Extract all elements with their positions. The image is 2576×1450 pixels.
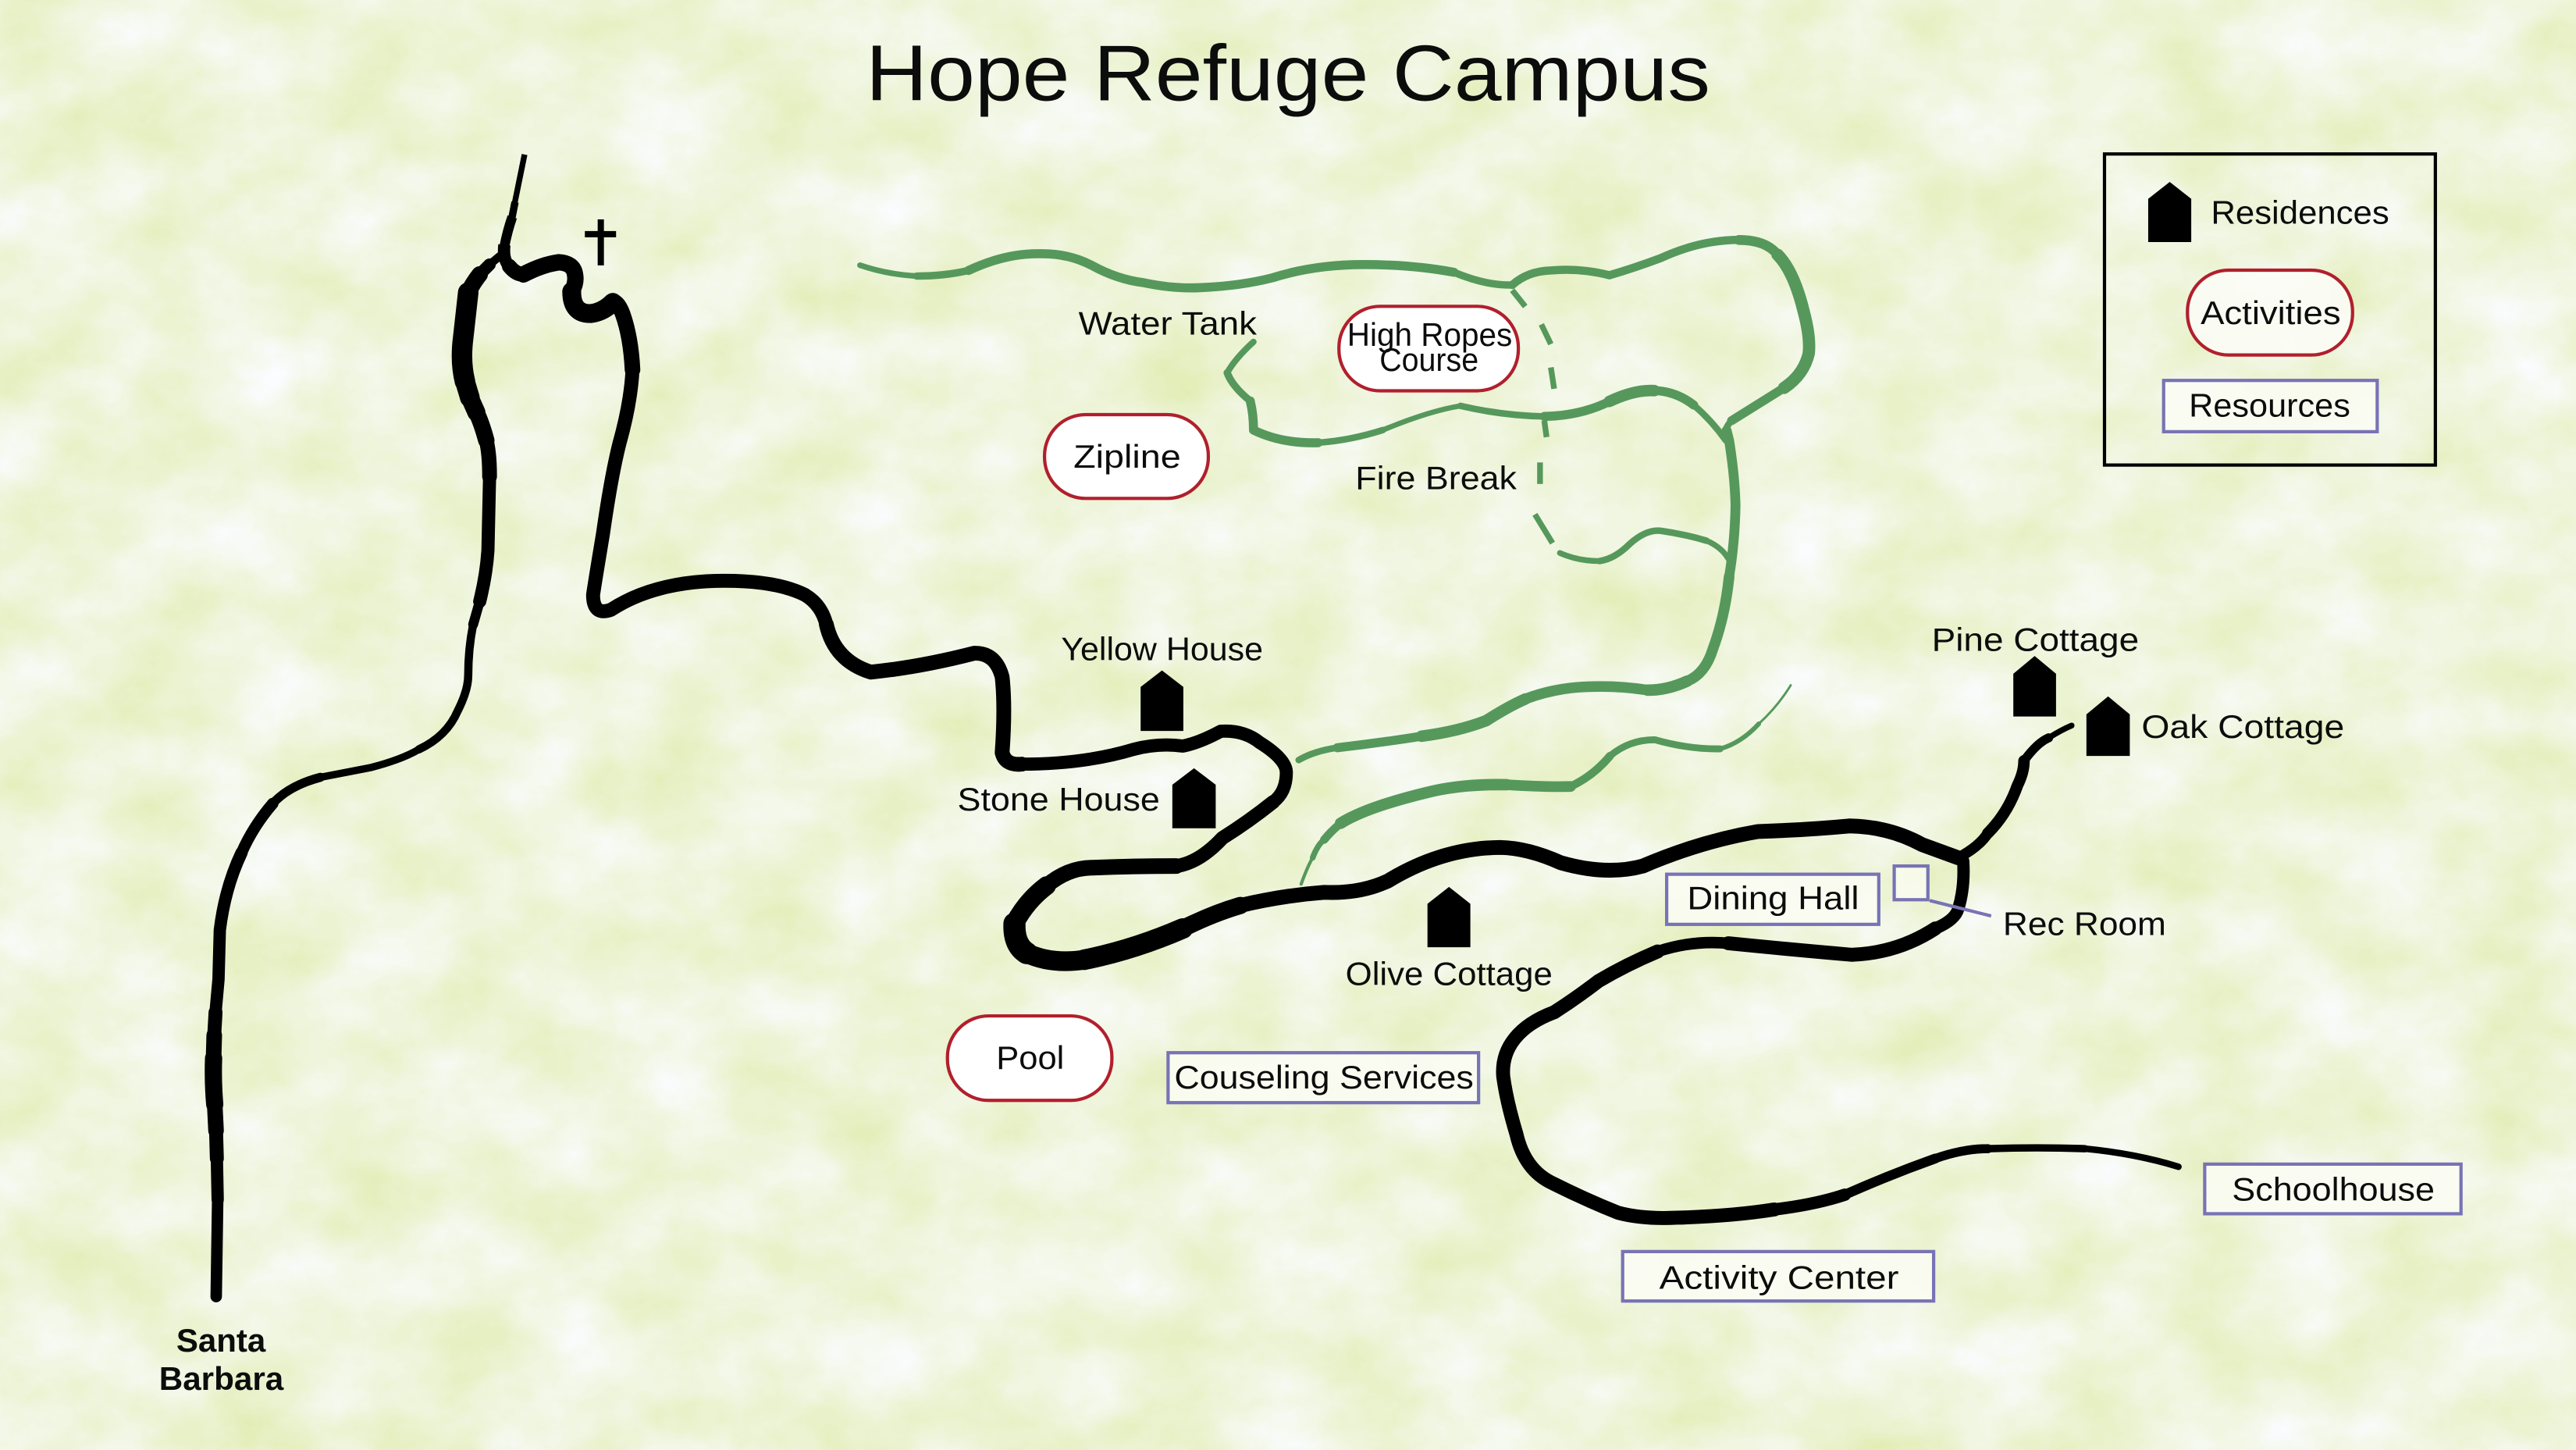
activity: Zipline [1044, 415, 1208, 498]
activity: High Ropes Course [1339, 306, 1518, 390]
road branch to the cottages [1959, 725, 2072, 858]
resource: Couseling Services [1168, 1053, 1478, 1103]
icon: Olive Cottage [1428, 887, 1471, 947]
legend label: residences: Residences [2211, 194, 2389, 231]
rec room leader line [1930, 900, 1991, 916]
label: Yellow House: Yellow House [1061, 631, 1263, 668]
resource: Dining Hall [1667, 875, 1879, 925]
activity: Pool [948, 1016, 1112, 1100]
legend swatch: activities [2187, 270, 2353, 355]
legend icon: residences [2148, 182, 2191, 242]
legend [2105, 154, 2435, 465]
resource: Schoolhouse [2204, 1164, 2461, 1213]
icon: Yellow House [1140, 671, 1183, 731]
label: Olive Cottage: Olive Cottage [1346, 955, 1553, 992]
resource: Dining Hall: Dining Hall [1687, 879, 1859, 916]
green trail: eastern descent [1299, 430, 1735, 760]
road branch to the schoolhouse [1503, 861, 2179, 1218]
activity: High Ropes Course: Course [1379, 341, 1478, 378]
fire break dashed line [1512, 290, 1554, 543]
resource: Rec Room marker [1895, 866, 1928, 900]
green trail: small connector [1560, 531, 1728, 561]
label: Water Tank: Water Tank [1079, 305, 1258, 341]
icon: Pine Cottage [2013, 656, 2056, 717]
legend swatch: resources: Resources [2189, 387, 2350, 423]
activity: Pool: Pool [996, 1039, 1064, 1076]
resource: Couseling Services: Couseling Services [1174, 1059, 1474, 1096]
icon: Oak Cottage [2087, 696, 2129, 756]
label: Santa Barbara: Barbara [159, 1360, 284, 1397]
green trail: lower river [1301, 686, 1791, 884]
main road: Santa Barbara up to the chapel [213, 256, 500, 1297]
label: Santa Barbara: Santa [176, 1322, 266, 1359]
green trail: upper ridge [860, 240, 1809, 436]
resource: Schoolhouse: Schoolhouse [2232, 1171, 2435, 1208]
activity: Zipline: Zipline [1073, 438, 1181, 475]
main road: chapel loop to the fork [509, 262, 1959, 961]
label: Pine Cottage: Pine Cottage [1932, 621, 2139, 657]
legend swatch: activities: Activities [2201, 294, 2341, 331]
road spur to the north [504, 155, 525, 266]
resource: Activity Center [1623, 1252, 1934, 1301]
legend swatch: resources [2164, 380, 2377, 432]
resource: Activity Center: Activity Center [1660, 1259, 1898, 1296]
label: Fire Break: Fire Break [1355, 460, 1517, 497]
label: Oak Cottage: Oak Cottage [2141, 708, 2344, 745]
title: Hope Refuge Campus [866, 30, 1710, 117]
icon: Stone House [1172, 768, 1215, 828]
activity: High Ropes Course: High Ropes [1347, 316, 1512, 353]
label: Stone House: Stone House [958, 781, 1160, 818]
label: Santa Barbara [159, 1322, 284, 1397]
green trail: water tank branch [1227, 342, 1726, 443]
icon: chapel cross [585, 219, 616, 265]
label: Rec Room: Rec Room [2003, 906, 2166, 942]
